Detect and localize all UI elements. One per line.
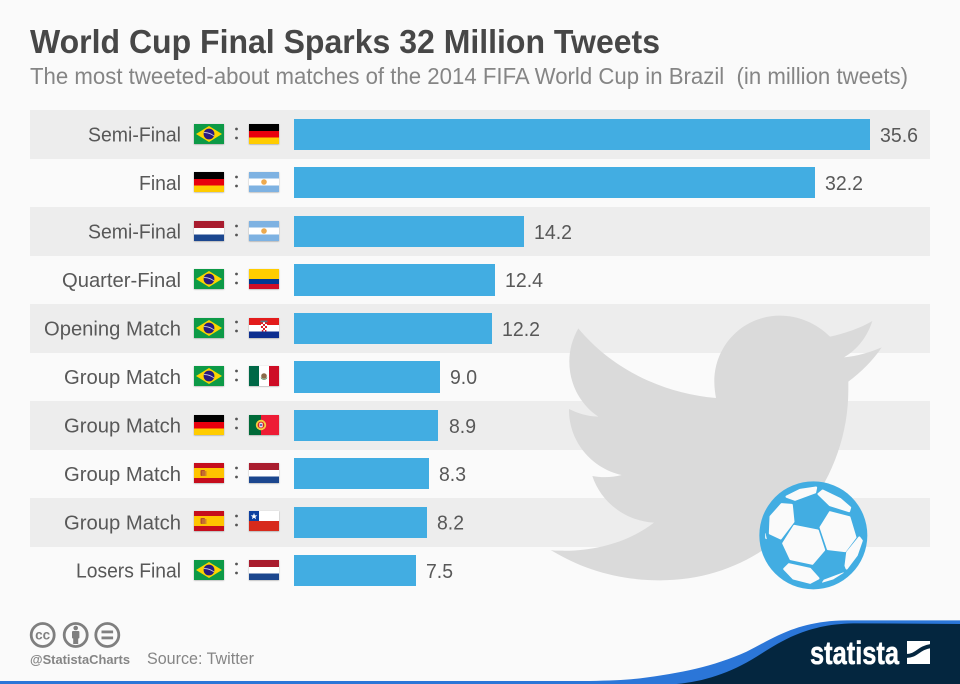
row: Quarter-Final Brazil v Colombia 12.4: Quarter-Final [62, 269, 181, 292]
row: Group Match Brazil v Mexico 9.0 [64, 361, 477, 393]
alternating row bands [30, 110, 930, 547]
credit handle: @StatistaCharts [30, 652, 130, 667]
footer wave [0, 620, 960, 684]
value: 7.5 [426, 561, 453, 583]
row: Opening Match Brazil v Croatia 12.2: Opening Match [44, 318, 181, 340]
bar [294, 119, 870, 150]
bar [294, 361, 440, 393]
row: Final Germany v Argentina 32.2 [139, 167, 863, 198]
bar [294, 555, 416, 586]
bar [294, 458, 429, 489]
value: 8.3 [439, 464, 466, 486]
icon: creative commons licence [31, 624, 119, 646]
flags: Brazil and Mexico [194, 366, 279, 386]
flags: Spain and Netherlands [194, 463, 279, 483]
value: 8.9 [449, 416, 476, 438]
flags: Netherlands and Argentina [194, 221, 279, 241]
icon: creative commons licence: cc [35, 628, 51, 642]
flags: Brazil and Netherlands [194, 560, 279, 580]
value: 12.2 [502, 319, 540, 341]
value: 12.4 [505, 270, 543, 292]
flags: Brazil and Colombia [194, 269, 279, 289]
row: Losers Final Brazil v Netherlands 7.5 [76, 555, 453, 586]
title: World Cup Final Sparks 32 Million Tweets [30, 23, 660, 60]
bar [294, 313, 492, 344]
bar [294, 507, 427, 538]
flags: Brazil and Croatia [194, 318, 279, 338]
flags: Spain and Chile [194, 511, 279, 531]
bar [294, 410, 438, 441]
row: Group Match Spain v Netherlands 8.3 [64, 458, 466, 489]
value: 35.6 [880, 125, 918, 147]
row: Semi-Final Brazil v Germany 35.6: Semi-Final [88, 124, 181, 146]
row: Opening Match Brazil v Croatia 12.2 [44, 313, 540, 344]
row: Losers Final Brazil v Netherlands 7.5: Losers Final [76, 560, 181, 582]
row: Semi-Final Netherlands v Argentina 14.2 [88, 216, 572, 247]
bar [294, 216, 524, 247]
value: 32.2 [825, 173, 863, 195]
row: Group Match Germany v Portugal 8.9 [64, 410, 476, 441]
row: Group Match Spain v Chile 8.2: Group Match [64, 512, 181, 534]
row: Final Germany v Argentina 32.2: Final [139, 172, 181, 195]
row: Semi-Final Netherlands v Argentina 14.2: Semi-Final [88, 220, 181, 244]
value: 8.2 [437, 512, 464, 534]
bar [294, 167, 815, 198]
icon: soccer ball [759, 481, 867, 589]
row: Semi-Final Brazil v Germany 35.6 [88, 119, 918, 150]
flags: Brazil and Germany [194, 124, 279, 144]
value: 14.2 [534, 222, 572, 244]
row: Group Match Spain v Chile 8.2 [64, 507, 464, 538]
flags: Germany and Portugal [194, 415, 279, 435]
icon: statista square [906, 641, 931, 664]
bar [294, 264, 495, 296]
icon: twitter bird watermark [551, 316, 882, 580]
row: Group Match Germany v Portugal 8.9: Group Match [64, 414, 181, 438]
flags: Germany and Argentina [194, 172, 279, 192]
row: Group Match Brazil v Mexico 9.0: Group Match [64, 366, 181, 389]
subtitle: The most tweeted-about matches of the 2014 FIFA World Cup in Brazil (in million tweets) [30, 63, 908, 89]
source: Source: Twitter [147, 649, 254, 668]
logo: statista: statista [810, 635, 899, 671]
row: Group Match Spain v Netherlands 8.3: Group Match [64, 463, 181, 486]
row: Quarter-Final Brazil v Colombia 12.4 [62, 264, 543, 296]
value: 9.0 [450, 367, 477, 389]
